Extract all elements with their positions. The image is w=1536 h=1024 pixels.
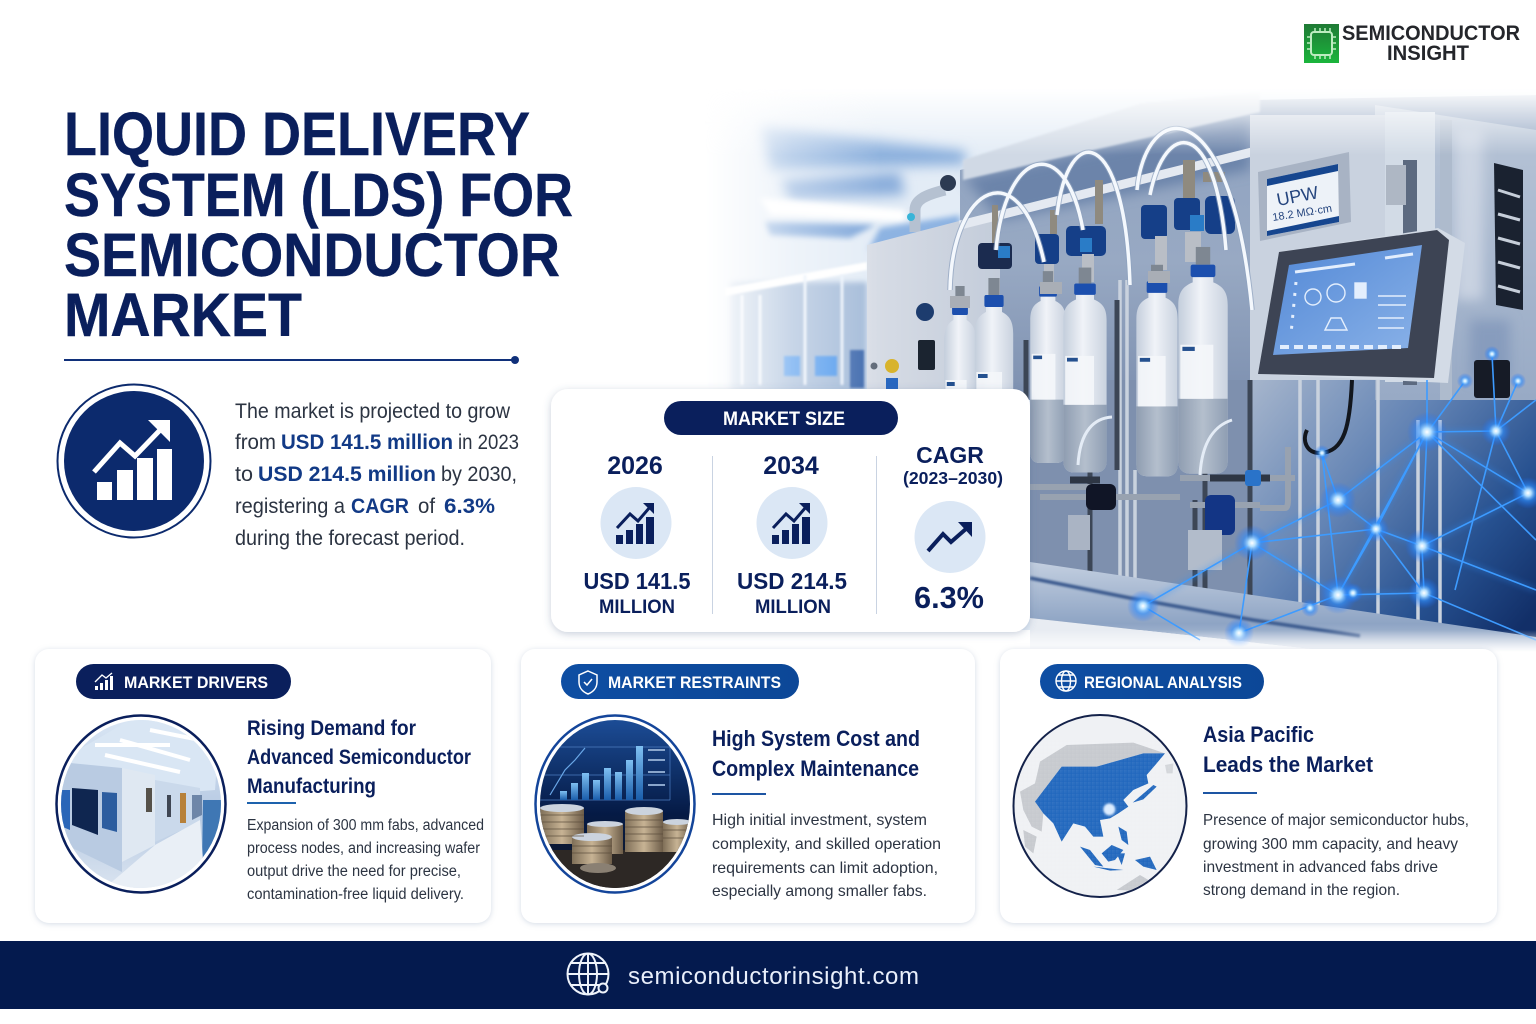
title: SYSTEM (LDS) FOR	[64, 161, 573, 229]
market size pill: MARKET SIZE	[723, 409, 845, 430]
clear tubing arcs	[950, 128, 1252, 310]
intro paragraph: 6.3%	[444, 495, 495, 518]
lower plumbing wall	[1030, 400, 1248, 630]
column: 2034: 2034	[763, 452, 819, 480]
panel: market restraints	[521, 649, 975, 923]
logo wordmark: INSIGHT	[1387, 42, 1469, 65]
vent	[1494, 163, 1523, 310]
photo: coins and chart	[535, 715, 695, 895]
below shelf fade	[1030, 618, 1311, 649]
column: CAGR	[903, 442, 1003, 615]
column: 2026	[584, 452, 690, 618]
market size pill	[664, 401, 898, 435]
lower valves and blocks	[1068, 470, 1261, 570]
restraints text: High initial investment, system	[712, 812, 927, 829]
drivers text: contamination-free liquid delivery.	[247, 886, 464, 903]
column: CAGR: 6.3%	[914, 580, 984, 615]
UPW label plate: UPW	[1275, 182, 1320, 210]
silver bottle collars	[950, 271, 1170, 308]
title	[64, 100, 573, 349]
icon: growth chart badge	[58, 384, 210, 538]
market restraints pill: MARKET RESTRAINTS	[608, 673, 781, 692]
intro paragraph: of	[418, 495, 435, 518]
plumbing pipes	[1026, 280, 1440, 640]
upper right panel	[1375, 105, 1536, 400]
UPW label plate	[1258, 152, 1351, 241]
drivers text	[247, 817, 484, 903]
blue valves	[978, 196, 1235, 269]
regional heading: Asia Pacific	[1203, 722, 1314, 747]
title: MARKET	[64, 281, 302, 349]
main pipe rail	[960, 150, 1260, 225]
intro paragraph: registering a	[235, 495, 345, 518]
regional text: investment in advanced fabs drive	[1203, 859, 1438, 876]
drivers text: process nodes, and increasing wafer	[247, 840, 480, 857]
drivers heading: Manufacturing	[247, 775, 376, 798]
market restraints pill	[561, 664, 799, 699]
intro paragraph: to	[235, 463, 253, 486]
title divider	[64, 356, 519, 364]
intro paragraph: during the forecast period.	[235, 527, 465, 550]
right column and hinge	[1250, 112, 1452, 400]
intro paragraph: in 2023	[458, 431, 519, 454]
column: 2034: MILLION	[755, 597, 831, 618]
lab corridor backdrop	[729, 108, 1119, 630]
drivers heading: Rising Demand for	[247, 717, 416, 740]
intro paragraph	[235, 400, 519, 550]
intro paragraph: USD 141.5 million	[281, 431, 453, 454]
shelf	[1030, 562, 1536, 651]
shelf dark line	[1030, 578, 1360, 636]
restraints heading: Complex Maintenance	[712, 756, 919, 781]
intro paragraph: from	[235, 431, 276, 454]
column: 2034: USD 214.5	[737, 568, 847, 594]
regional heading: Leads the Market	[1203, 752, 1374, 777]
panel: regional analysis	[1000, 649, 1497, 923]
logo	[1304, 22, 1520, 65]
footer band	[0, 941, 1536, 1009]
logo wordmark: SEMICONDUCTOR	[1342, 22, 1520, 45]
chemical bottles	[946, 247, 1228, 476]
drivers heading	[247, 717, 471, 798]
regional text	[1203, 812, 1469, 899]
column: 2026: 2026	[607, 452, 663, 480]
title: SEMICONDUCTOR	[64, 221, 560, 289]
website url: semiconductorinsight.com	[628, 963, 919, 990]
cable	[1305, 380, 1352, 453]
wall reflections	[1455, 130, 1510, 380]
icon: chip logo mark	[1304, 24, 1339, 63]
logo wordmark	[1342, 22, 1520, 65]
photo: cleanroom corridor	[55, 715, 227, 895]
column: CAGR: (2023–2030)	[903, 468, 1003, 488]
drivers heading: Advanced Semiconductor	[247, 746, 471, 769]
under-beam shading	[965, 118, 1250, 220]
restraints text: complexity, and skilled operation	[712, 836, 941, 853]
drivers text: Expansion of 300 mm fabs, advanced	[247, 817, 484, 834]
intro paragraph: by 2030,	[441, 463, 517, 486]
metal fittings	[992, 160, 1225, 290]
power socket	[1474, 360, 1510, 398]
column: 2034	[737, 452, 847, 618]
hero photo: liquid delivery equipment	[729, 95, 1536, 650]
map: Asia Pacific globe	[1014, 715, 1186, 897]
restraints text	[712, 812, 941, 900]
clear lower hoses	[1078, 417, 1232, 475]
intro paragraph: USD 214.5 million	[258, 463, 436, 486]
regional analysis pill	[1040, 664, 1264, 699]
top beam	[963, 92, 1260, 180]
restraints heading	[712, 726, 920, 781]
restraints text: requirements can limit adoption,	[712, 860, 938, 877]
pipe elbow with valve	[907, 175, 956, 232]
column: 2026: MILLION	[599, 597, 675, 618]
panel: market drivers	[35, 649, 491, 923]
glowing network	[1127, 346, 1536, 648]
icon: footer globe	[568, 954, 608, 994]
regional text: Presence of major semiconductor hubs,	[1203, 812, 1469, 829]
cabinet controls	[870, 303, 935, 390]
regional analysis pill: REGIONAL ANALYSIS	[1084, 673, 1242, 692]
title: LIQUID DELIVERY	[64, 100, 530, 168]
drivers text: output drive the need for precise,	[247, 863, 461, 880]
panel: market size	[551, 389, 1030, 632]
intro paragraph: CAGR	[351, 495, 409, 518]
intro paragraph: The market is projected to grow	[235, 400, 511, 423]
regional text: strong demand in the region.	[1203, 882, 1400, 899]
regional text: growing 300 mm capacity, and heavy	[1203, 836, 1458, 853]
market drivers pill: MARKET DRIVERS	[124, 673, 268, 692]
lower right wall with dark gradient	[1250, 375, 1536, 655]
stainless cabinet wall	[960, 95, 1536, 400]
column: CAGR: CAGR	[916, 442, 984, 468]
restraints heading: High System Cost and	[712, 726, 920, 751]
regional heading	[1203, 722, 1374, 777]
column: 2026: USD 141.5	[584, 568, 690, 594]
left control cabinet	[867, 220, 1000, 389]
UPW label plate: 18.2 MΩ·cm	[1272, 203, 1333, 224]
restraints text: especially among smaller fabs.	[712, 883, 927, 900]
market drivers pill	[76, 664, 291, 699]
control touch screen	[1258, 228, 1465, 383]
